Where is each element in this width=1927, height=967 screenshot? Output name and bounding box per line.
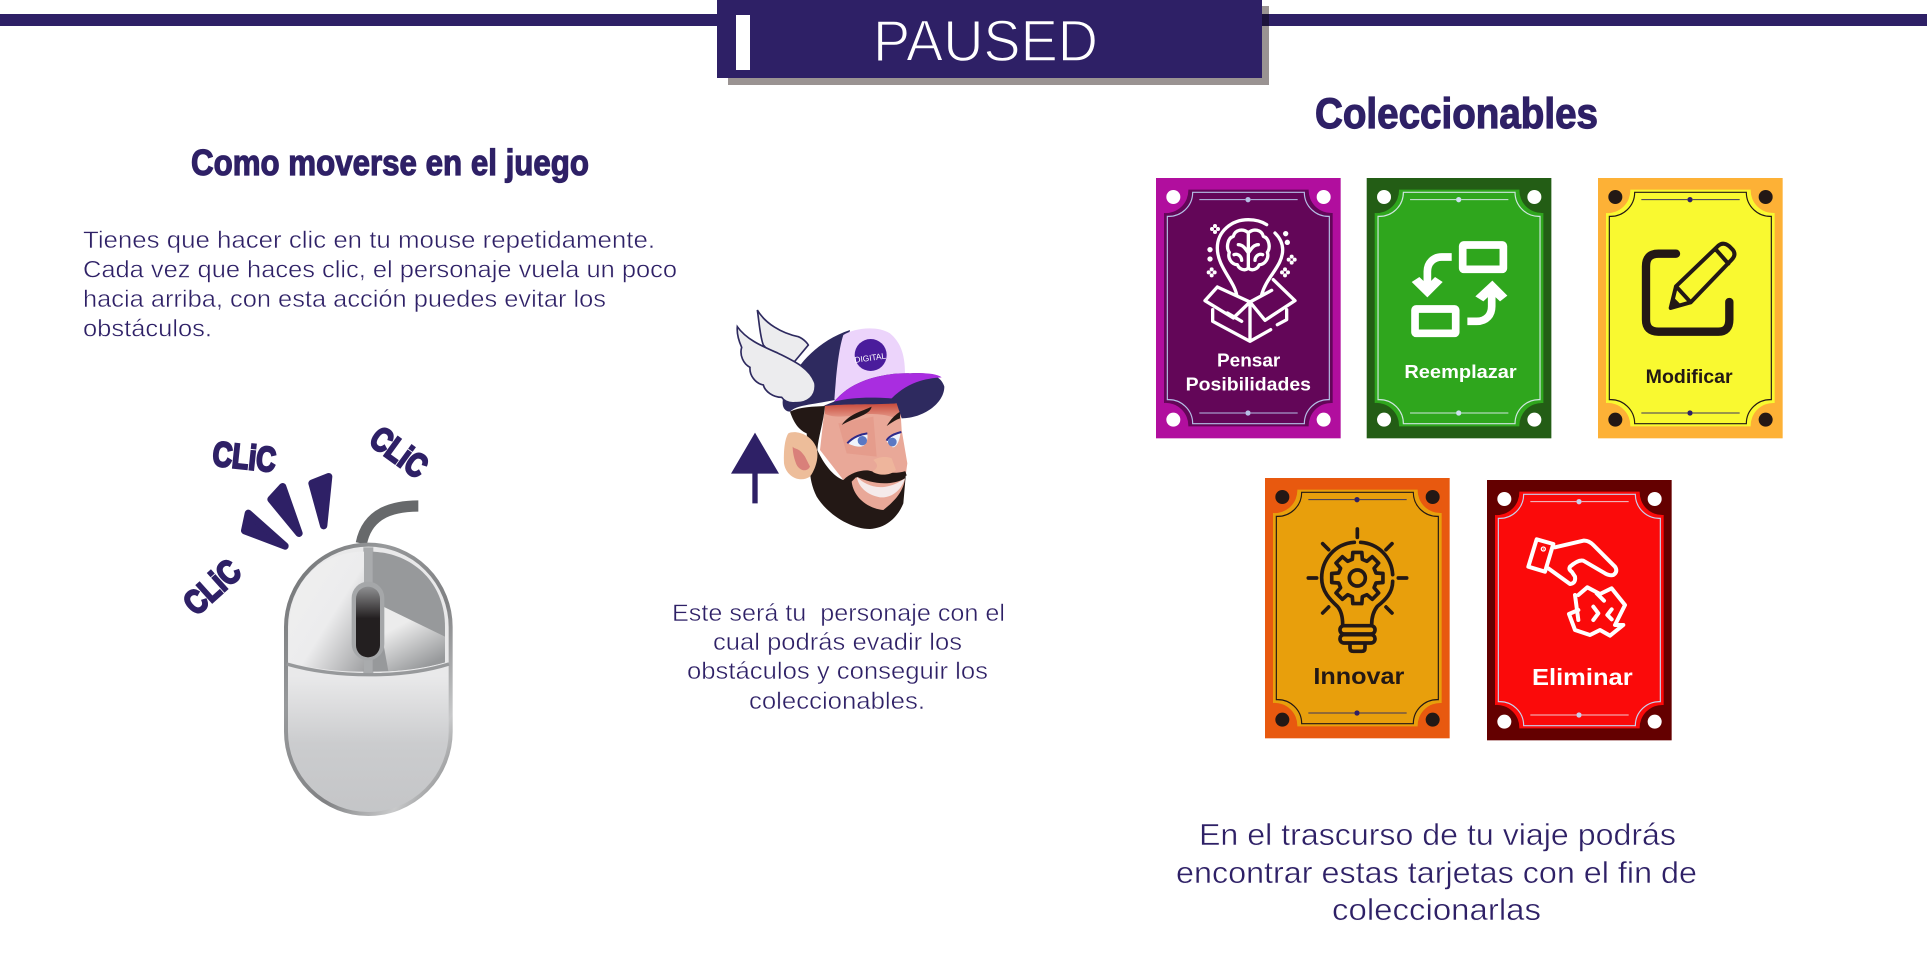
card label: Posibilidades <box>1186 373 1311 394</box>
cap <box>783 328 944 418</box>
text: character description: coleccionables. <box>749 688 925 715</box>
title: PAUSED <box>873 9 1098 74</box>
card: modificar <box>1598 178 1783 438</box>
card: eliminar <box>1487 480 1672 740</box>
text: character description <box>672 600 1005 715</box>
card label: Modificar <box>1646 367 1733 388</box>
text: character description: Este será tu personaje con el <box>672 600 1005 627</box>
icon: swap arrows <box>1412 245 1507 333</box>
card: pensar posibilidades <box>1156 178 1341 438</box>
card label: Pensar <box>1217 349 1280 370</box>
text: instructions: hacia arriba, con esta acción puedes evitar los <box>83 286 606 313</box>
hair and beard <box>790 406 906 529</box>
text: character description: obstáculos y conseguir los <box>687 658 988 685</box>
text: instructions: obstáculos. <box>83 316 212 342</box>
ear <box>784 432 817 479</box>
cap badge <box>855 339 887 371</box>
header bar <box>0 14 1927 26</box>
text: collectibles description: En el trascurso de tu viaje podrás <box>1199 817 1676 852</box>
icon: bulb with gear <box>1308 529 1407 651</box>
card label <box>1186 349 1311 394</box>
card label: Reemplazar <box>1404 361 1517 382</box>
card label: Innovar <box>1313 663 1404 689</box>
mouse body <box>286 545 451 814</box>
click word top: CLiC <box>211 435 278 480</box>
text: collectibles description <box>1176 817 1697 927</box>
click word left: CLiC <box>177 553 249 623</box>
text: collectibles description: coleccionarlas <box>1332 892 1541 927</box>
text: instructions <box>83 227 677 342</box>
scroll wheel <box>352 582 384 660</box>
click wedges <box>245 477 329 546</box>
heading: como moverse: Como moverse en el juego <box>191 142 589 183</box>
icon: pencil and square <box>1646 244 1734 332</box>
text: instructions: Tienes que hacer clic en tu mouse repetidamente. <box>83 227 655 254</box>
card: reemplazar <box>1367 178 1551 438</box>
text: collectibles description: encontrar estas tarjetas con el fin de <box>1176 855 1697 890</box>
mouse illustration with clicks <box>177 420 451 814</box>
card label: Eliminar <box>1532 664 1633 690</box>
chin and teeth <box>852 477 905 510</box>
eyes and brows <box>842 407 872 425</box>
heading: coleccionables: Coleccionables <box>1315 90 1598 138</box>
title panel <box>717 0 1262 78</box>
up arrow <box>731 433 779 503</box>
click word right: CLiC <box>363 420 434 486</box>
text: character description: cual podrás evadir los <box>713 629 962 656</box>
upper wing <box>757 310 808 365</box>
face <box>820 403 907 512</box>
nose <box>872 457 896 475</box>
character illustration <box>731 310 944 529</box>
icon: brain bulb in box <box>1205 220 1297 341</box>
pause mark <box>736 15 750 70</box>
cable <box>361 506 418 543</box>
icon: hand dropping paper <box>1528 539 1625 636</box>
title panel shadow <box>728 6 1269 85</box>
cap: DIGITAL <box>854 350 887 365</box>
card: innovar <box>1265 478 1450 738</box>
lower wing <box>737 327 815 403</box>
text: instructions: Cada vez que haces clic, el personaje vuela un poco <box>83 256 677 284</box>
